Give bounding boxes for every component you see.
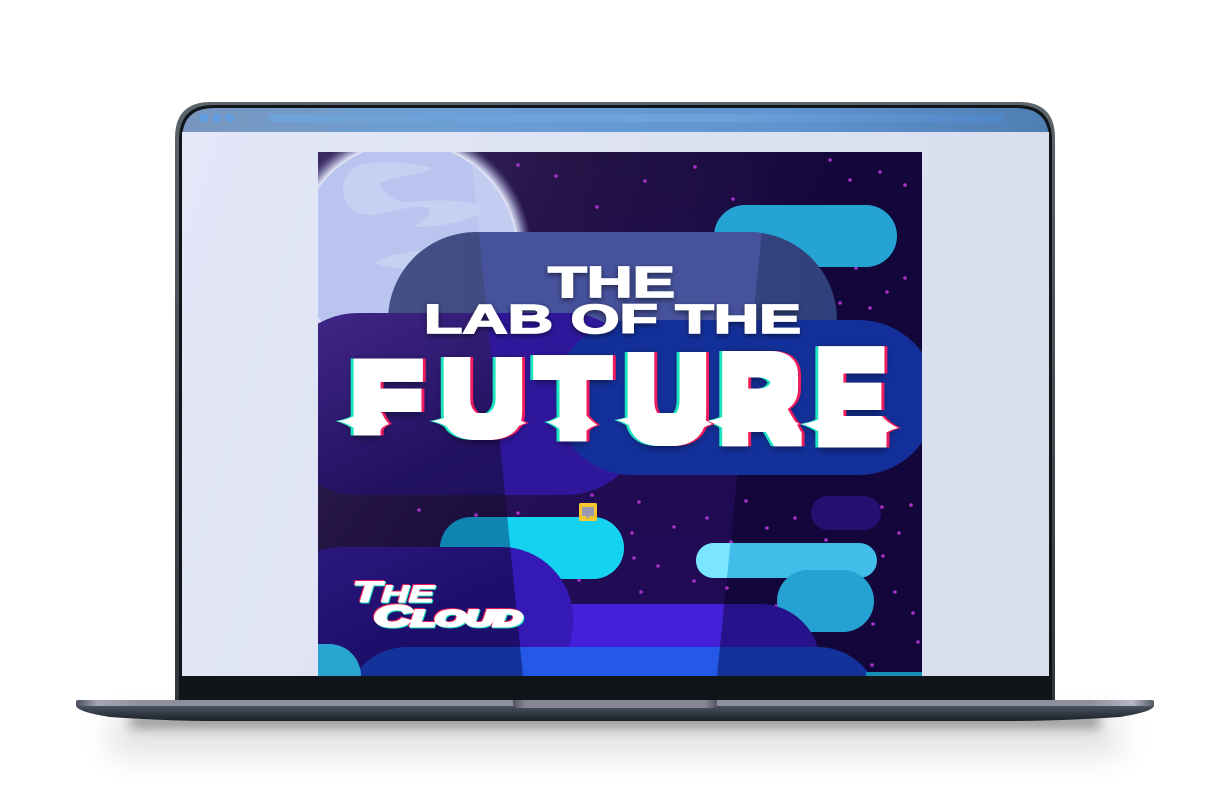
light blue pill beam section	[696, 543, 730, 578]
cloud left beam section	[488, 313, 620, 495]
title: future: E	[816, 326, 886, 469]
blue hill	[360, 647, 868, 676]
title: the lab of the: LAB OF THE	[424, 296, 801, 342]
title: future	[335, 344, 901, 454]
cloud bottom left	[318, 547, 573, 668]
light blue pill	[696, 543, 877, 578]
window buttons	[200, 114, 234, 122]
blue hill beam section	[520, 647, 720, 676]
laptop	[175, 102, 1055, 702]
cloud bottom left beam section	[510, 548, 573, 647]
laptop lid frame	[175, 102, 1055, 702]
bezel inner	[179, 105, 1052, 702]
cloud right blue	[555, 320, 936, 475]
title: future: U	[442, 342, 524, 454]
purple hill beam section	[568, 604, 724, 647]
laptop contact shadow	[130, 714, 1100, 728]
title: the lab of the	[424, 264, 803, 340]
cyan pill centre beam section	[507, 517, 624, 579]
title: the lab of the: THE	[548, 258, 675, 307]
purple hill	[720, 604, 818, 647]
teal corner	[318, 644, 361, 676]
hinge notch	[513, 700, 717, 708]
stars	[417, 158, 920, 667]
light beam on background	[505, 223, 738, 604]
space background	[318, 152, 922, 676]
moon	[318, 152, 529, 324]
base underside	[76, 706, 1154, 721]
moon glow	[318, 152, 529, 324]
cyan pill top right	[714, 205, 897, 267]
laptop base	[76, 700, 1154, 721]
cloud top	[388, 232, 837, 320]
base top band	[76, 700, 1154, 706]
title: future: T	[537, 338, 609, 458]
glitch spikes	[338, 413, 898, 436]
page background	[182, 132, 1049, 676]
logo: the cloud	[353, 580, 524, 629]
small dark pill	[811, 496, 881, 530]
teal pill	[777, 570, 874, 632]
address bar	[268, 114, 1005, 122]
title: future: R	[720, 332, 799, 466]
title: future: U	[626, 334, 708, 464]
moon swirl lower	[375, 250, 425, 268]
browser toolbar	[182, 108, 1049, 140]
browser window	[182, 108, 1049, 676]
teal strip	[866, 672, 922, 676]
logo: the cloud: C LOUD	[374, 601, 522, 633]
logo: the cloud: T HE	[352, 576, 436, 609]
infographic artwork	[318, 152, 922, 676]
cloud top beam section	[479, 232, 762, 324]
laptop chin	[179, 676, 1052, 700]
moon disc	[318, 152, 515, 322]
title: future: F	[351, 345, 422, 449]
cloud left purple	[318, 313, 604, 495]
laptop wide shadow	[110, 718, 1120, 754]
cyan pill centre	[440, 517, 624, 579]
yellow comment icon	[579, 503, 597, 521]
moon swirl upper	[343, 163, 481, 227]
moon beam tint	[472, 165, 515, 232]
